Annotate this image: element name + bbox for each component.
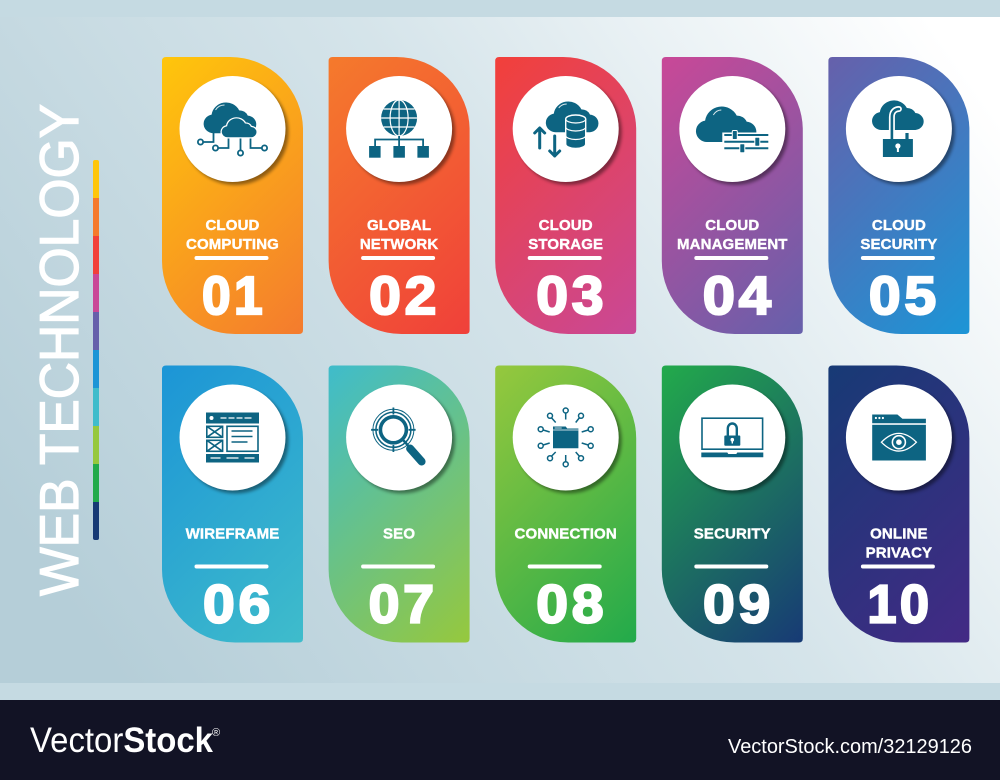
divider (861, 564, 935, 568)
divider (194, 564, 268, 568)
panel: 02 global network (329, 57, 470, 334)
panel: 08 connection (495, 366, 636, 642)
divider (528, 564, 602, 568)
label: CLOUD (539, 217, 593, 234)
divider (528, 256, 602, 260)
icon: cloud database (535, 101, 598, 156)
number: 10 (867, 574, 932, 634)
label: ONLINE (870, 526, 928, 542)
panel: 07 seo (329, 366, 470, 642)
title: web technology: WEB TECHNOLOGY (28, 104, 90, 596)
label (866, 526, 932, 562)
icon: laptop lock (701, 418, 763, 457)
number: 02 (369, 266, 440, 326)
panel: 03 cloud storage (495, 57, 636, 334)
panel: 01 cloud computing (162, 57, 303, 334)
panel: 09 security (662, 366, 803, 642)
icon: magnifier target (371, 408, 422, 462)
divider (694, 256, 768, 260)
icon: cloud padlock (872, 100, 924, 157)
label: PRIVACY (866, 544, 932, 562)
number: 04 (703, 266, 775, 326)
icon: browser eye (872, 414, 926, 460)
divider (694, 564, 768, 568)
label (186, 217, 279, 253)
number: 01 (202, 266, 266, 326)
label: CLOUD (205, 217, 260, 234)
label (677, 217, 788, 253)
panel: 04 cloud management (662, 57, 803, 334)
divider (194, 256, 268, 260)
label (860, 217, 937, 253)
label: CLOUD (872, 217, 926, 234)
icon: globe network (369, 100, 429, 158)
footer logo: ® (212, 727, 220, 739)
icon: cloud network (198, 102, 267, 156)
number: 07 (369, 574, 438, 634)
label (528, 217, 603, 253)
number: 09 (703, 574, 774, 634)
label: STORAGE (528, 236, 603, 253)
panel: 06 wireframe (162, 366, 303, 642)
label: SEO (383, 526, 415, 542)
footer bar (0, 700, 1000, 780)
label: GLOBAL (367, 217, 431, 234)
label: SECURITY (694, 526, 771, 542)
label: SECURITY (860, 236, 937, 253)
icon: folder connections (538, 408, 593, 467)
label: MANAGEMENT (677, 236, 788, 253)
color bar legend (93, 160, 99, 540)
label: NETWORK (360, 236, 438, 253)
divider (361, 256, 435, 260)
panel: 05 cloud security (828, 57, 969, 334)
divider (861, 256, 935, 260)
label (360, 217, 438, 253)
number: 05 (869, 266, 940, 326)
number: 03 (536, 266, 607, 326)
label: CLOUD (705, 217, 759, 234)
divider (361, 564, 435, 568)
icon: cloud sliders (696, 107, 769, 153)
footer logo: VectorStock (30, 721, 214, 760)
icon: wireframe layout (206, 412, 259, 462)
number: 06 (203, 574, 274, 634)
footer image id: VectorStock.com/32129126 (728, 736, 972, 758)
label: CONNECTION (515, 526, 617, 542)
panel: 10 online privacy (828, 366, 969, 642)
number: 08 (536, 574, 607, 634)
label: COMPUTING (186, 236, 279, 253)
label: WIREFRAME (186, 526, 279, 542)
